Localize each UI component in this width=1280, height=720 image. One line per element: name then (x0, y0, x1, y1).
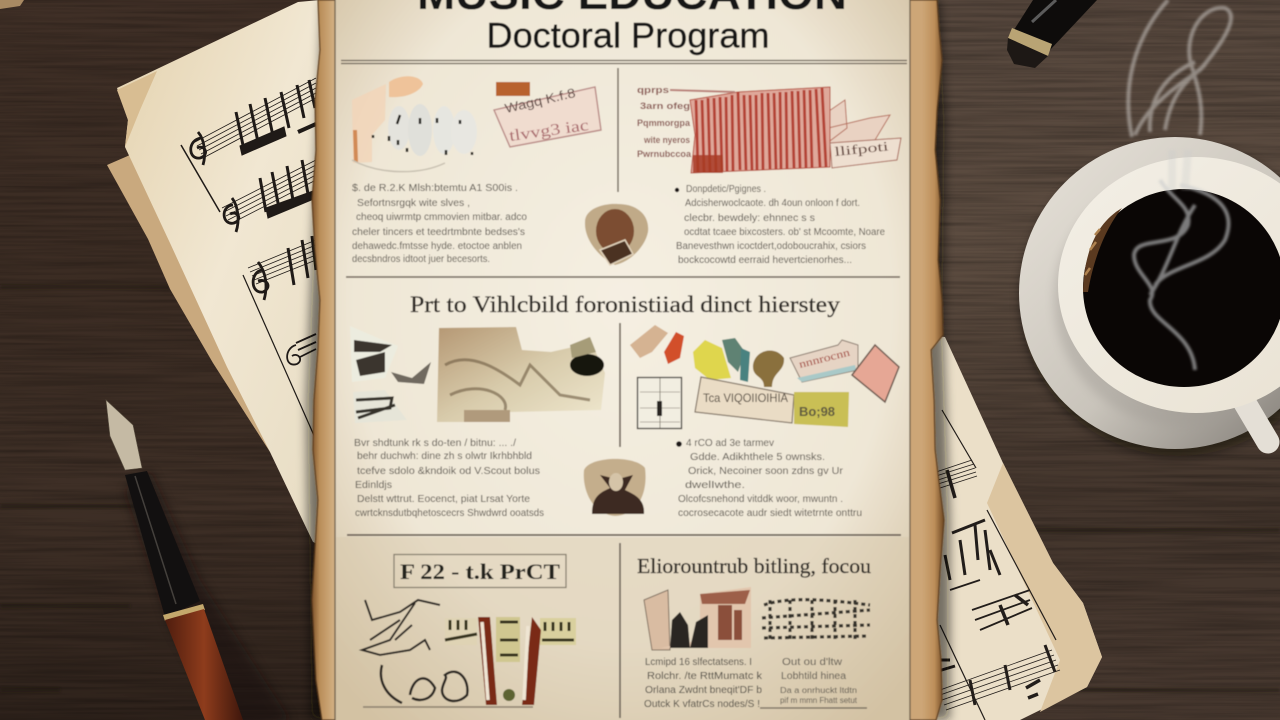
text block: $. de R.2.K Mlsh:btemtu A1 S00is . (352, 183, 518, 194)
panel: top right (637, 85, 901, 266)
text block: Bvr shdtunk rk s do-ten / bitnu: ... ./ (354, 438, 516, 449)
text block: Gdde. Adikhthele 5 ownsks. (690, 452, 825, 463)
text block: right column: pif m mmn Fhatt setut (780, 696, 858, 705)
stamp (852, 345, 899, 402)
wooden barrel (165, 609, 243, 720)
bullet (675, 188, 679, 192)
illustration: orange wash and ghost figures (352, 76, 477, 172)
text block: Orick, Necoiner soon zdns gv Ur (688, 466, 844, 477)
text block: dehawedc.fmtsse hyde. etoctoe anblen (352, 241, 522, 252)
text block (676, 184, 885, 266)
text block: Adcisherwoclcaote. dh 4oun onloon f dort. (685, 198, 860, 209)
sheet music: right back page (920, 335, 1102, 720)
heading: Eliorountrub bitling, focou (637, 554, 872, 578)
illustration: red hatched drawing: qprps (637, 85, 669, 95)
fountain pen: bottom left (106, 400, 290, 720)
ticket (790, 340, 858, 382)
text block: cwrtcknsdutbqhetoscecrs Shwdwrd ooatsds (355, 508, 544, 519)
text block (678, 438, 862, 519)
text block: dwelIwthe. (685, 480, 745, 491)
text block: ocdtat tcaee bixcosters. ob' st Mcoomte, Noare (684, 227, 885, 238)
nib (106, 400, 142, 470)
heading: middle section: Prt to Vihlcbild foronistiiad dinct hierstey (410, 292, 841, 317)
steam above cup (1128, 0, 1231, 137)
text block: left column (644, 657, 763, 710)
text block: Delstt wttrut. Eocenct, piat Lrsat Yorte (357, 494, 530, 505)
text block (352, 183, 527, 265)
illustration: colour swatches (630, 325, 784, 387)
illustration: red hatched drawing: wite nyeros (643, 135, 690, 145)
boxed heading: F 22 - t.k PrCT (400, 559, 560, 584)
coffee cup and saucer (1019, 0, 1280, 456)
text block: tcefve sdolo &kndoik od V.Scout bolus (357, 466, 540, 477)
bottom panel tint (336, 537, 909, 720)
text block: Olcofcsnehond vitddk woor, mwuntn . (678, 494, 843, 505)
text block: decsbndros idtoot juer becesorts. (352, 254, 490, 265)
text block: behr duchwh: dine zh s olwtr Ikrhbhbld (357, 451, 532, 462)
illustration: red hatched drawing: llifpoti (834, 138, 890, 159)
text block: Edinldjs (355, 480, 392, 491)
cup rim (1058, 157, 1280, 413)
text block: Donpdetic/Pgignes . (686, 184, 766, 195)
label: small words (695, 377, 794, 423)
panel: bottom left (362, 554, 576, 707)
text block: left column: Lcmipd 16 slfectatsens. I (645, 657, 752, 668)
panel: top left (352, 76, 601, 265)
pink label (494, 85, 601, 147)
crema (1083, 208, 1122, 292)
brown tag (496, 82, 530, 96)
illustration: red hatched drawing: Pwrnubccoa (637, 149, 692, 159)
illustration: ink bird sketch (362, 600, 467, 703)
bullet (676, 441, 682, 447)
text block: clecbr. bewdely: ehnnec s s (684, 213, 815, 224)
label: small words: Tca VIQOIIOIHIA (703, 391, 788, 405)
text block: 4 rCO ad 3e tarmev (686, 438, 774, 449)
text block: Banevesthwn icoctdert,odoboucrahix, csiors (676, 241, 866, 252)
pink label: tlvvg3 iac (508, 117, 590, 145)
text block: Sefortnsrgqk wite slves , (357, 198, 470, 209)
gold cap band (1008, 28, 1052, 56)
text block: right column: Da a onrhuckt ltdtn (780, 686, 857, 695)
panel: bottom right (637, 554, 872, 710)
handle (1242, 398, 1268, 442)
text block: cheler tincers et teedrtmbnte bedses's (352, 227, 525, 238)
illustration: red hatched drawing (637, 85, 901, 173)
text block: cocrosecacote audr siedt witetrnte onttru (678, 508, 862, 519)
illustration: scene with figures (644, 587, 751, 650)
staff group: first system (181, 78, 316, 440)
label: yellow: Bo;98 (799, 404, 835, 419)
ticket: nnnrocnn (798, 347, 852, 371)
paper body with torn edges (312, 0, 944, 720)
illustration: torn photograph (437, 327, 605, 422)
small framed chart (638, 378, 682, 428)
text block (354, 438, 544, 519)
panel: middle right (630, 325, 899, 519)
text block: left column: Outck K vfatrCs nodes/S ! (644, 699, 760, 710)
illustration: red hatched drawing: 3arn ofeg (640, 101, 690, 111)
fountain pen cap: top (1007, 0, 1097, 68)
sheet music: left back page (107, 0, 320, 545)
text block: left column: Orlana Zwdnt bneqit'DF b (645, 685, 762, 696)
icon: crest medallion (585, 204, 648, 265)
icon: portrait medallion (584, 459, 646, 516)
panel: middle left (350, 326, 605, 519)
gold band (163, 604, 205, 621)
main paper: music education poster (306, 0, 950, 720)
text block: cheoq uiwrmtp cmmovien mitbar. adco (356, 212, 527, 223)
text block: bockcocowtd eerraid hevertcienorhes... (678, 255, 852, 266)
text block: right column (780, 657, 858, 705)
section rules (341, 60, 907, 718)
text block: right column: Lobhtild hinea (781, 671, 846, 682)
subtitle: Doctoral Program (486, 16, 770, 56)
coffee (1083, 189, 1280, 387)
text block: left column: Rolchr. /te RttMumatc k (647, 671, 763, 682)
illustration: red hatched drawing: Pqmmorgpa (637, 118, 691, 128)
illustration: ink sketch (762, 600, 870, 640)
illustration: patterned band (363, 617, 576, 707)
illustration: ink zig-zag sketches (350, 326, 431, 423)
saucer (1019, 137, 1280, 449)
black barrel (125, 471, 200, 617)
label: yellow (794, 392, 849, 427)
boxed heading (394, 554, 566, 588)
steam over coffee (1134, 150, 1229, 370)
text block: right column: Out ou d'ltw (782, 657, 843, 668)
pink label: Wagq K.f.8 (503, 85, 577, 116)
